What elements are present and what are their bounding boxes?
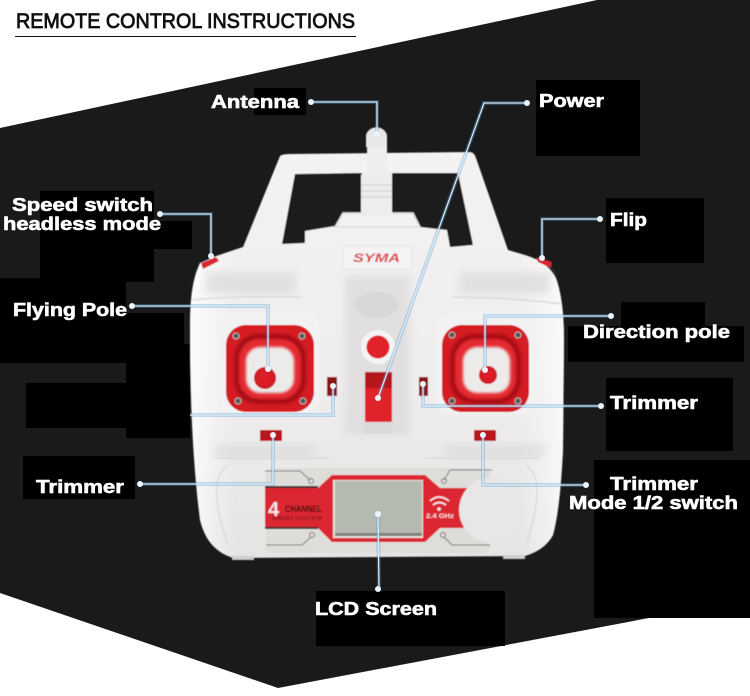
red band — [265, 475, 470, 542]
left control stick — [220, 313, 320, 414]
label: lcd screen: LCD Screen — [315, 599, 437, 619]
label: speed switch headless mode — [3, 195, 161, 234]
moulded detail — [193, 213, 561, 545]
label: flying pole: Flying Pole — [13, 300, 127, 320]
soft body shading — [206, 272, 550, 457]
channel badge: CHANNEL — [285, 504, 322, 514]
shoulder buttons — [201, 257, 552, 269]
remote controller — [190, 127, 564, 560]
centre red button — [361, 330, 395, 364]
label: trimmer and mode switch — [569, 474, 738, 513]
leader: lcd screen — [375, 511, 381, 592]
channel badge: RADIO SYSTEM — [272, 516, 322, 522]
leader: flying pole — [129, 303, 271, 372]
label: speed switch headless mode: headless mode — [3, 214, 161, 234]
label: trimmer and mode switch: Mode 1/2 switch — [569, 493, 738, 513]
wifi icon — [426, 497, 454, 520]
leader: power — [375, 100, 530, 401]
label: trimmer right: Trimmer — [610, 393, 698, 413]
antenna — [361, 127, 392, 216]
leader: inner left trimmer — [190, 383, 336, 415]
power switch — [363, 372, 393, 434]
trim switches — [260, 377, 496, 441]
handle openings — [282, 173, 473, 247]
logo: SYMA — [353, 251, 400, 265]
white sticker circle — [459, 477, 525, 543]
controller body — [190, 152, 564, 558]
leader: lower right trimmer — [480, 432, 589, 488]
leader: inner right trimmer — [420, 381, 604, 409]
title: REMOTE CONTROL INSTRUCTIONS — [16, 10, 355, 33]
feet — [232, 555, 525, 560]
logo — [343, 246, 412, 269]
label: antenna: Antenna — [211, 92, 300, 112]
wifi icon: 2.4 GHz — [426, 514, 454, 520]
printed front panel — [265, 468, 525, 553]
label: speed switch headless mode: Speed switch — [12, 195, 153, 215]
channel badge — [268, 499, 322, 522]
leader: flip — [539, 216, 603, 261]
leader lines — [129, 99, 614, 592]
right control stick — [436, 313, 536, 414]
label: trimmer and mode switch: Trimmer — [610, 474, 698, 494]
channel badge: 4 — [268, 499, 280, 521]
label: trimmer left: Trimmer — [36, 477, 124, 497]
label: power: Power — [539, 91, 604, 111]
leader: direction pole — [482, 313, 614, 373]
leader: lower left trimmer — [137, 432, 276, 487]
label: direction pole: Direction pole — [583, 322, 730, 342]
centre oval — [355, 292, 399, 318]
leader: speed switch — [157, 211, 214, 259]
leader: antenna — [308, 99, 380, 137]
label: flip: Flip — [610, 210, 647, 230]
lcd screen — [333, 480, 423, 538]
